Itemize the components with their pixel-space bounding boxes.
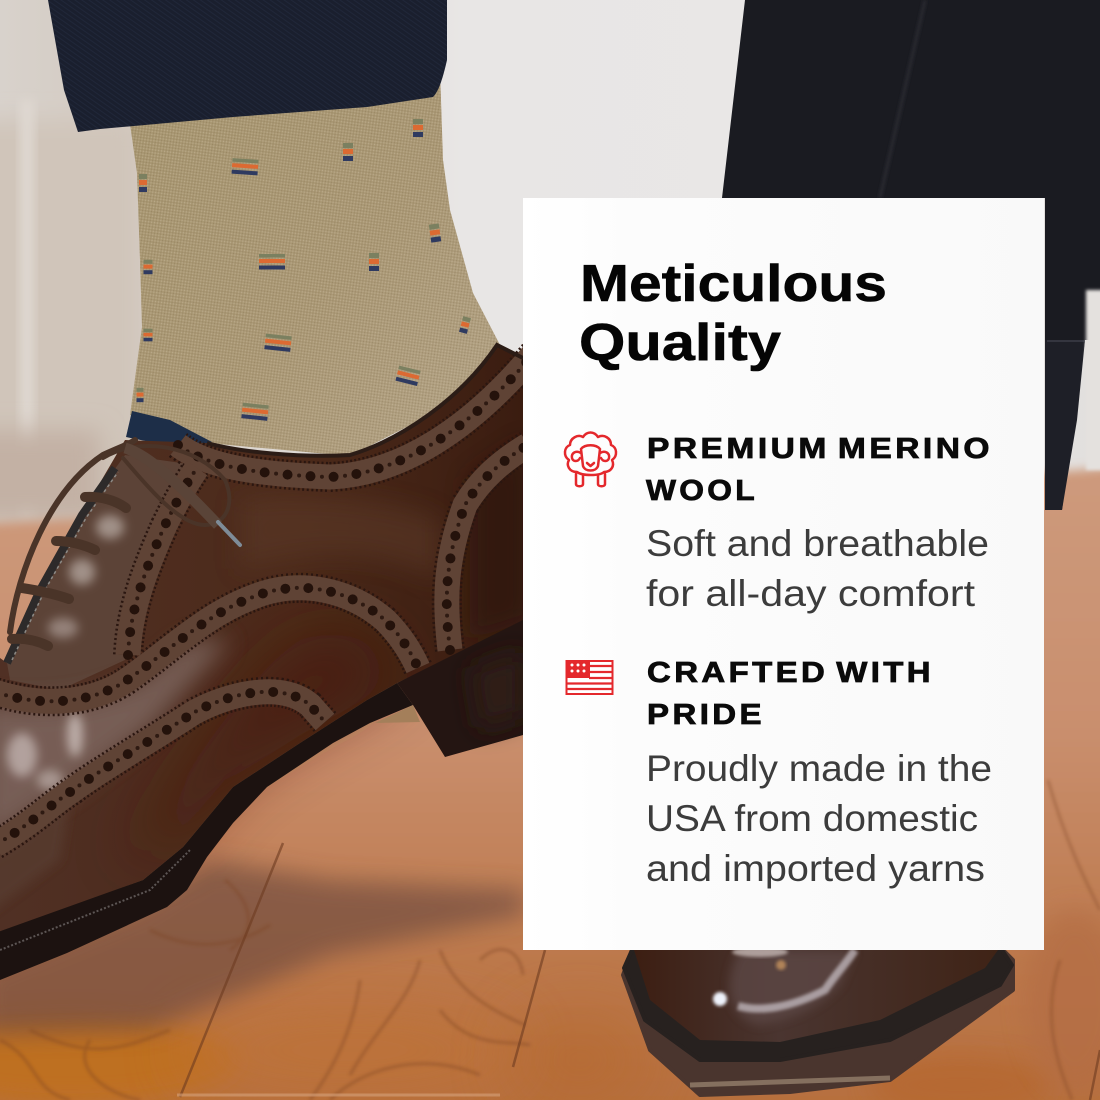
shoe sole xyxy=(0,683,413,982)
facing panel xyxy=(7,455,195,690)
heading xyxy=(646,433,993,507)
description xyxy=(646,523,989,614)
sock xyxy=(128,70,500,456)
floor grain xyxy=(0,880,530,1100)
sock pattern dots xyxy=(136,119,471,421)
heel block xyxy=(397,620,523,757)
icon: sheep xyxy=(565,432,616,486)
heading xyxy=(647,657,934,731)
welt xyxy=(624,950,1012,1060)
background: wooden floor xyxy=(0,465,1100,1100)
heading: WOOL xyxy=(646,475,758,507)
right shoe toe xyxy=(623,947,1013,1095)
floor plank seams xyxy=(180,843,1100,1100)
icon: American flag xyxy=(566,660,612,694)
title: Meticulous xyxy=(580,255,887,313)
white text panel xyxy=(523,198,1044,950)
description: and imported yarns xyxy=(646,848,985,889)
heading: CRAFTED WITH xyxy=(647,657,934,689)
shoe lining xyxy=(126,411,212,450)
brogue bands xyxy=(0,352,535,845)
description: USA from domestic xyxy=(646,798,978,839)
sole edge highlight xyxy=(690,1078,890,1085)
leather shine spots xyxy=(7,515,124,790)
floor shadow of shoe xyxy=(0,860,525,1035)
left trouser cuff xyxy=(48,0,447,132)
eyelet edge xyxy=(7,468,115,663)
right trouser leg xyxy=(722,0,1100,510)
toe cap shine xyxy=(713,947,855,1009)
title: Quality xyxy=(579,314,781,372)
laces xyxy=(10,440,240,646)
left shoe xyxy=(0,345,535,982)
description: Proudly made in the xyxy=(646,748,992,789)
reddish shading on quarter xyxy=(120,632,400,860)
item: premium merino wool xyxy=(565,432,993,614)
heading: PRIDE xyxy=(647,699,765,731)
title xyxy=(579,255,887,372)
description xyxy=(646,748,992,889)
collar edge xyxy=(207,345,523,456)
shoe upper xyxy=(0,345,530,933)
background: wall xyxy=(0,0,1100,600)
vamp highlight xyxy=(0,640,230,850)
toe cap xyxy=(634,950,998,1042)
heading: PREMIUM MERINO xyxy=(647,433,993,465)
wedge gap under arch xyxy=(375,705,420,723)
description: for all-day comfort xyxy=(646,573,976,614)
item: crafted with pride xyxy=(566,657,992,889)
description: Soft and breathable xyxy=(646,523,989,564)
outer sole xyxy=(623,950,1013,1095)
